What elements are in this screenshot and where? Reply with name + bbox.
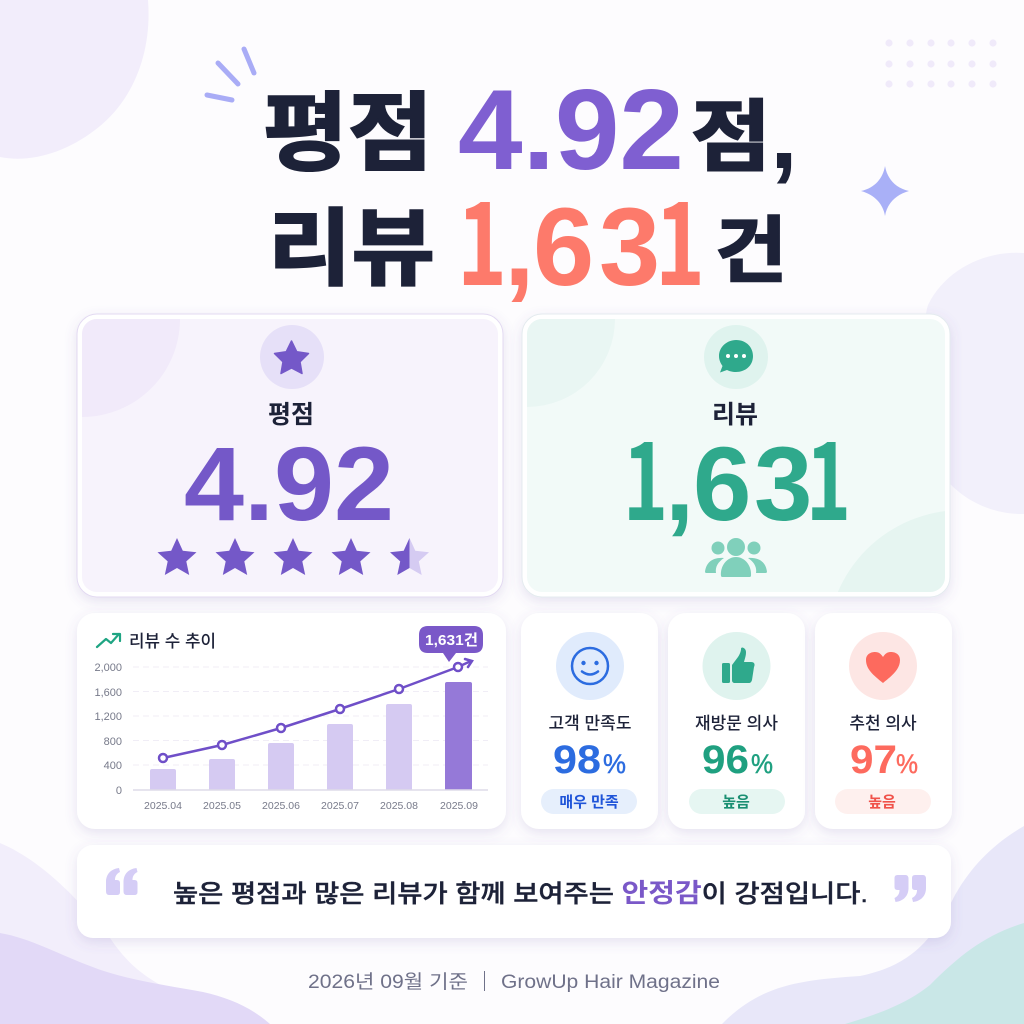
panel: review trend chart bbox=[77, 613, 506, 829]
badge: 매우 만족 bbox=[541, 789, 637, 814]
value: 97%: % bbox=[896, 749, 918, 779]
badge: 높음 bbox=[689, 789, 785, 814]
rating value: 4.92 bbox=[184, 426, 394, 543]
title: 4.92 bbox=[458, 67, 684, 194]
icon: trend arrow bbox=[97, 634, 120, 647]
icon: four-point sparkle bbox=[861, 166, 909, 216]
bars bbox=[150, 682, 472, 790]
y axis labels: 1,600 bbox=[94, 687, 122, 699]
panel: reviews bbox=[518, 314, 954, 604]
icon: smiley bbox=[556, 632, 624, 700]
x axis labels: 2025.09 bbox=[440, 800, 478, 812]
value: 97%: 97 bbox=[850, 738, 897, 782]
label: 재방문 의사 bbox=[695, 714, 778, 733]
panel: customer satisfaction bbox=[521, 613, 658, 829]
x axis labels: 2025.06 bbox=[262, 800, 300, 812]
badge: 매우 만족: 매우 만족 bbox=[559, 794, 619, 811]
value: 97% bbox=[850, 738, 918, 782]
title: , bbox=[770, 78, 798, 190]
title bbox=[263, 67, 798, 318]
trend line bbox=[159, 659, 472, 762]
chart title: 리뷰 수 추이 bbox=[129, 632, 216, 651]
value: 98% bbox=[553, 738, 626, 782]
value: 98%: % bbox=[603, 749, 626, 779]
title: 평점 bbox=[263, 86, 433, 182]
panel: recommend intent bbox=[815, 613, 952, 829]
x axis labels: 2025.04 bbox=[144, 800, 182, 812]
title: 건 bbox=[715, 212, 787, 292]
title: 1 bbox=[457, 156, 507, 318]
value: 98%: 98 bbox=[553, 738, 601, 782]
y axis labels: 2,000 bbox=[94, 662, 122, 674]
footer bbox=[308, 971, 720, 993]
x axis labels: 2025.05 bbox=[203, 800, 241, 812]
rating stars bbox=[158, 538, 429, 575]
y axis labels bbox=[94, 662, 122, 797]
x axis labels: 2025.08 bbox=[380, 800, 418, 812]
badge: 높음 bbox=[835, 789, 931, 814]
value: 96%: 96 bbox=[702, 738, 749, 782]
y axis labels: 800 bbox=[104, 736, 122, 748]
title: ,63 bbox=[504, 186, 660, 309]
reviews value: 1 bbox=[806, 399, 851, 551]
panel: quote bbox=[77, 845, 951, 938]
reviews value bbox=[623, 399, 851, 551]
y axis labels: 1,200 bbox=[94, 711, 122, 723]
reviews value: 1 bbox=[623, 399, 668, 551]
label: reviews: 리뷰 bbox=[712, 401, 758, 429]
quote text: 높은 평점과 많은 리뷰가 함께 보여주는 안정감 이 강점입니다. bbox=[173, 878, 868, 908]
label: 추천 의사 bbox=[849, 714, 917, 733]
icon: opening quote mark bbox=[106, 868, 138, 895]
title: 1 bbox=[655, 156, 705, 318]
icon: closing quote mark bbox=[894, 875, 926, 902]
icon: thumbs up bbox=[702, 632, 770, 700]
callout: 1,631건 bbox=[419, 626, 483, 662]
label: rating: 평점 bbox=[268, 401, 314, 429]
decorative dot grid bbox=[885, 39, 997, 88]
icon: star badge bbox=[260, 325, 324, 389]
y axis labels: 0 bbox=[116, 785, 122, 797]
footer: GrowUp Hair Magazine bbox=[501, 972, 720, 993]
value: 96% bbox=[702, 738, 773, 782]
value: 96%: % bbox=[751, 749, 773, 779]
x axis labels bbox=[144, 800, 478, 812]
icon: people group bbox=[705, 538, 767, 577]
panel: rating bbox=[74, 314, 506, 604]
footer: 2026년 09월 기준 bbox=[308, 971, 468, 993]
decorative sparkle rays bbox=[207, 49, 254, 100]
badge: 높음: 높음 bbox=[722, 794, 750, 811]
label: 고객 만족도 bbox=[549, 714, 631, 733]
title: 리뷰 bbox=[268, 202, 435, 296]
badge: 높음: 높음 bbox=[868, 794, 896, 811]
callout: 1,631건: 1,631건 bbox=[425, 632, 478, 649]
panel: revisit intent bbox=[668, 613, 805, 829]
reviews value: ,63 bbox=[665, 426, 812, 543]
x axis labels: 2025.07 bbox=[321, 800, 359, 812]
y axis labels: 400 bbox=[104, 760, 122, 772]
icon: heart bbox=[849, 632, 917, 700]
icon: speech bubble badge bbox=[704, 325, 768, 389]
title: 점 bbox=[691, 93, 771, 181]
